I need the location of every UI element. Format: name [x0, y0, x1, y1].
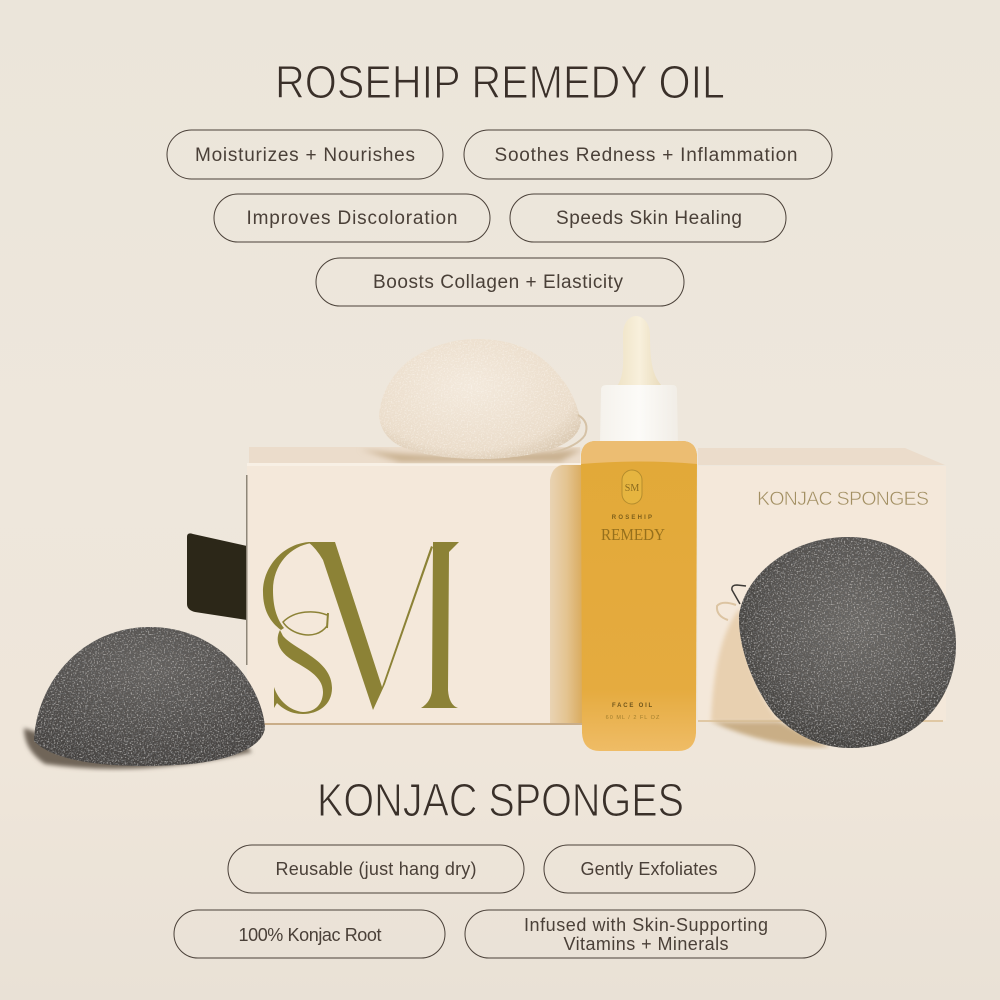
bottle: 60 ML / 2 FL OZ: [606, 715, 660, 721]
benefit pills: Konjac Sponges: 100% Konjac Root: [238, 925, 382, 945]
black ribbon loop: [187, 533, 247, 620]
bottle: [581, 316, 697, 751]
bottle logo: [622, 470, 642, 504]
shadow under dome sponge: [24, 728, 252, 769]
glass body: [581, 441, 697, 751]
box label: KONJAC SPONGES: [757, 488, 929, 510]
benefit pills: Rosehip Remedy Oil: Speeds Skin Healing: [556, 208, 742, 229]
bottle: REMEDY: [601, 525, 665, 544]
dome charcoal sponge: [34, 627, 265, 766]
benefit pills: Konjac Sponges: [174, 845, 826, 958]
benefit pills: Konjac Sponges: Reusable (just hang dry): [276, 859, 476, 879]
benefit pills: Rosehip Remedy Oil: Soothes Redness + Inflammation: [494, 145, 798, 166]
product scene: [24, 316, 956, 769]
round charcoal sponge: [717, 537, 956, 748]
benefit pills: Rosehip Remedy Oil: Moisturizes + Nourishes: [195, 145, 415, 166]
heading: Rosehip Remedy Oil: ROSEHIP REMEDY OIL: [275, 56, 725, 108]
benefit pills: Rosehip Remedy Oil: [167, 130, 832, 306]
bottle: FACE OIL: [612, 703, 654, 709]
benefit pills: Konjac Sponges: Gently Exfoliates: [580, 859, 718, 879]
box logo: CSM monogram: [263, 542, 459, 714]
heading: Konjac Sponges: KONJAC SPONGES: [317, 774, 684, 826]
box: left face: [246, 447, 587, 725]
cream sponge: [360, 339, 586, 462]
bottle: SM: [625, 483, 639, 494]
box: right face: [698, 448, 946, 722]
benefit pills: Rosehip Remedy Oil: Boosts Collagen + Elasticity: [373, 272, 624, 293]
bottle labels: ROSEHIP: [612, 515, 654, 521]
benefit pills: Rosehip Remedy Oil: Improves Discoloration: [246, 208, 458, 229]
cap: [600, 385, 678, 444]
round sponge shadow: [712, 722, 830, 747]
benefit pills: Konjac Sponges: Vitamins + Minerals: [564, 934, 728, 954]
dropper: [617, 316, 662, 386]
benefit pills: Konjac Sponges: Infused with Skin-Supporting: [524, 915, 768, 935]
